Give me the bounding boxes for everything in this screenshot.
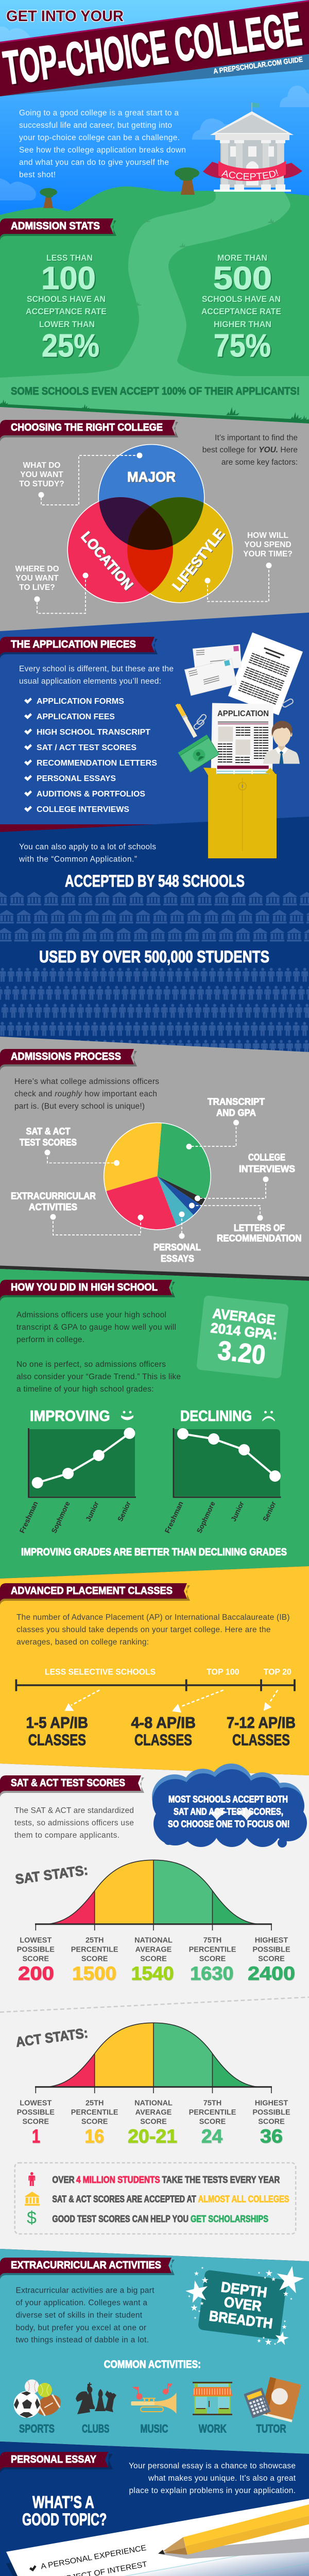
- chart: act bell curve: SCORE: [23, 2117, 49, 2126]
- chart: sat bell curve: PERCENTILE: [71, 1945, 118, 1954]
- subheading: what's a good topic: GOOD TOPIC?: [22, 2510, 107, 2529]
- intro text: [129, 2462, 296, 2495]
- stat: class counts: CLASSES: [134, 1731, 192, 1749]
- label: how will you spend your time: YOUR TIME?: [243, 550, 293, 558]
- intro text: [14, 1806, 134, 1840]
- label: what do you want to study: [19, 461, 64, 488]
- fact: four million students: TAKE THE TESTS EVERY YEAR: [162, 2175, 280, 2185]
- label: transcript and gpa: AND GPA: [216, 1108, 256, 1118]
- chart: improving: [18, 1408, 136, 1534]
- chart: act bell curve: SCORE: [81, 2117, 108, 2126]
- callout cloud: [152, 1764, 307, 1848]
- icon rows: students: [0, 968, 309, 1054]
- label: sat and act test scores: TEST SCORES: [20, 1138, 77, 1148]
- stat: less than 100 schools: LESS THAN: [46, 253, 93, 263]
- label: how will you spend your time: HOW WILL: [247, 531, 288, 540]
- title banner: [0, 0, 309, 96]
- chart: declining: DECLINING: [180, 1408, 252, 1425]
- label: letters of recommendation: RECOMMENDATION: [217, 1233, 302, 1244]
- chart: improving: IMPROVING: [30, 1408, 110, 1425]
- venn diagram: [68, 445, 232, 602]
- chart: sat bell curve: [14, 1860, 295, 1984]
- chart: sat bell curve: 1500: [72, 1963, 116, 1984]
- chart: sat bell curve: SAT STATS:: [14, 1862, 89, 1887]
- chart: act bell curve: 24: [201, 2126, 222, 2147]
- panel: admissions process: [0, 1037, 309, 1283]
- icon: student: [28, 2172, 35, 2186]
- activity labels: SPORTS: [19, 2422, 55, 2435]
- intro text: what makes you unique. It’s also a great: [148, 2474, 296, 2483]
- stat: less than 100 schools: 100: [41, 261, 96, 296]
- callout: average gpa: 2014 GPA:: [210, 1320, 278, 1343]
- intro text: No one is perfect, so admissions officers: [16, 1360, 166, 1369]
- subheading: common activities: COMMON ACTIVITIES:: [104, 2359, 201, 2370]
- panel: choosing the right college: [0, 407, 309, 639]
- callout: depth over breadth: OVER: [223, 2294, 263, 2314]
- illustration: application packet: [176, 633, 303, 858]
- label: where do you want to live: YOU WANT: [15, 574, 59, 583]
- icon: school: [25, 2192, 40, 2206]
- intro text: your top-choice college can be a challenge.: [19, 133, 180, 142]
- callout: average gpa: 3.20: [216, 1335, 267, 1370]
- intro text: transcript & GPA to gauge how well you will: [16, 1323, 176, 1332]
- label: college interviews: INTERVIEWS: [239, 1164, 295, 1174]
- stat: less than 100 schools: LOWER THAN: [39, 319, 95, 329]
- intro text: best college for YOU. Here: [202, 446, 298, 454]
- intro text: and what you can do to give yourself the: [19, 158, 169, 167]
- checklist: APPLICATION FEES: [37, 713, 115, 721]
- label: sat and act test scores: [20, 1126, 77, 1148]
- stat: class counts: [26, 1714, 296, 1749]
- fact: almost all colleges: ALMOST ALL COLLEGES: [198, 2194, 289, 2204]
- connector: major: [38, 452, 142, 505]
- chart: sat bell curve: 75TH: [203, 1936, 221, 1944]
- venn labels: LIFESTYLE: [169, 526, 228, 594]
- arrows: [65, 1690, 278, 1713]
- heading: CHOOSING THE RIGHT COLLEGE: [11, 422, 163, 433]
- intro text: also consider your “Grade Trend.” This is like: [16, 1372, 181, 1381]
- icon: store: [193, 2382, 233, 2415]
- chart: sat bell curve: 25TH: [85, 1936, 104, 1944]
- intro text: diverse set of skills in their student: [15, 2311, 143, 2319]
- chart: sat bell curve: PERCENTILE: [189, 1945, 236, 1954]
- heading: [0, 1775, 144, 1797]
- connector: lifestyle: [205, 563, 272, 602]
- heading: admission stats: [0, 218, 116, 240]
- label: how will you spend your time: [243, 531, 293, 558]
- connector: interviews: [195, 1177, 269, 1201]
- pie chart: [104, 1122, 211, 1230]
- heading: HOW YOU DID IN HIGH SCHOOL: [11, 1282, 158, 1293]
- label: personal essays: [153, 1242, 201, 1264]
- heading: PERSONAL ESSAY: [11, 2454, 97, 2465]
- document sheet: [228, 633, 303, 715]
- chart: act bell curve: 16: [84, 2126, 104, 2147]
- chart: sat bell curve: SCORE: [199, 1955, 226, 1963]
- chart: act bell curve: SCORE: [140, 2117, 167, 2126]
- callout: depth over breadth: DEPTH: [220, 2279, 268, 2300]
- panel: test facts: [15, 2163, 296, 2234]
- paperclips and pen: [193, 698, 294, 730]
- panel: extracurricular activities: [0, 2249, 309, 2454]
- fact: four million students: OVER: [52, 2175, 75, 2185]
- label: personal essays: ESSAYS: [161, 1253, 194, 1264]
- student: [263, 721, 300, 764]
- application form: [211, 703, 273, 776]
- text: common application: with the “Common Application.”: [19, 855, 137, 863]
- chart: sat bell curve: NATIONAL: [134, 1936, 173, 1944]
- envelopes: [185, 644, 242, 696]
- good topic list: [29, 2544, 148, 2576]
- clouds: [0, 27, 309, 200]
- activity labels: [19, 2422, 286, 2435]
- money: [178, 735, 219, 772]
- connector: test scores: [44, 1150, 119, 1166]
- winding road: [0, 191, 309, 428]
- intro text: Admissions officers use your high school: [16, 1311, 166, 1319]
- chart: act bell curve: PERCENTILE: [189, 2108, 236, 2116]
- chart: act bell curve: PERCENTILE: [71, 2108, 118, 2116]
- intro text: perform in college.: [16, 1335, 84, 1344]
- label: what do you want to study: YOU WANT: [20, 470, 63, 479]
- heading: THE APPLICATION PIECES: [11, 639, 136, 650]
- chart: act bell curve: SCORE: [199, 2117, 226, 2126]
- stat: class counts: 1-5 AP/IB: [26, 1714, 88, 1732]
- icon: college building with accepted ribbon: [203, 103, 302, 192]
- connector: transcript and gpa: [186, 1120, 239, 1149]
- callout: depth over breadth: [184, 2264, 306, 2345]
- chart: declining: Sophmore: [195, 1500, 217, 1534]
- connector: personal essays: [179, 1212, 184, 1239]
- chart: declining: Freshman: [163, 1500, 185, 1534]
- heading: ADMISSIONS PROCESS: [11, 1051, 121, 1062]
- chart: declining: Senior: [261, 1500, 278, 1522]
- chart: sat bell curve: LOWEST: [20, 1936, 52, 1944]
- stat: less than 100 schools: [26, 253, 107, 364]
- label: college interviews: [239, 1152, 295, 1174]
- fact: scholarships: GOOD TEST SCORES CAN HELP YOU: [52, 2214, 188, 2224]
- checklist: AUDITIONS & PORTFOLIOS: [37, 790, 145, 799]
- timeline: TOP 20: [264, 1667, 291, 1676]
- panel: how you did in high school: [0, 1269, 309, 1579]
- label: personal essays: PERSONAL: [153, 1242, 201, 1252]
- activity labels: CLUBS: [82, 2422, 109, 2435]
- venn labels: [78, 469, 228, 594]
- panel: hills: [0, 103, 309, 423]
- intro text: classes you should take depends on your target college. Here are the: [16, 1625, 271, 1634]
- heading: [0, 1280, 175, 1301]
- timeline: [16, 1667, 295, 1713]
- heading: [0, 2258, 175, 2279]
- label: letters of recommendation: [217, 1223, 302, 1244]
- intro text: Here’s what college admissions officers: [14, 1077, 159, 1086]
- intro text: body, but prefer you excel at one or: [15, 2324, 146, 2332]
- intro text: The number of Advance Placement (AP) or International Baccalaureate (IB): [16, 1613, 289, 1622]
- stat: less than 100 schools: SCHOOLS HAVE AN: [27, 294, 106, 304]
- chart: declining: Junior: [229, 1500, 246, 1522]
- chart: sat bell curve: 200: [18, 1963, 54, 1984]
- chart: act bell curve: 1: [32, 2126, 40, 2147]
- chart: act bell curve: 36: [260, 2126, 283, 2147]
- heading: [0, 1049, 137, 1071]
- venn labels: MAJOR: [127, 469, 176, 485]
- intro text: check and roughly how important each: [14, 1090, 157, 1098]
- good topic list: A PERSONAL EXPERIENCE: [40, 2544, 147, 2571]
- fact: four million students: [52, 2175, 280, 2185]
- checklist: PERSONAL ESSAYS: [37, 774, 116, 783]
- heading: [0, 420, 178, 442]
- label: extracurricular activities: [11, 1191, 96, 1212]
- intro text: them to compare applicants.: [14, 1831, 119, 1840]
- callout cloud: MOST SCHOOLS ACCEPT BOTH: [168, 1794, 288, 1804]
- icon: left tree: [40, 188, 57, 208]
- icon: college building with accepted ribbon: ACCEPTED!: [221, 170, 279, 180]
- envelope: [203, 768, 277, 858]
- title: get into your: GET INTO YOUR: [6, 8, 124, 25]
- stat: more than 500 schools: SCHOOLS HAVE AN: [202, 294, 281, 304]
- chart: sat bell curve: POSSIBLE: [252, 1945, 290, 1954]
- label: letters of recommendation: LETTERS OF: [234, 1223, 285, 1233]
- chart: improving: Sophmore: [49, 1500, 72, 1534]
- icon: chess pieces: [76, 2382, 116, 2414]
- heading: [0, 1583, 190, 1605]
- intro text: Your personal essay is a chance to showcase: [129, 2462, 296, 2470]
- chart: act bell curve: LOWEST: [20, 2099, 52, 2107]
- callout: average gpa: AVERAGE: [212, 1306, 276, 1328]
- stat: more than 500 schools: [201, 253, 281, 364]
- chart: act bell curve: 20-21: [128, 2126, 177, 2147]
- intro text: are some key factors:: [221, 458, 298, 467]
- intro text: successful life and career, but getting into: [19, 121, 172, 130]
- label: college interviews: COLLEGE: [248, 1152, 285, 1162]
- fact: four million students: 4 MILLION STUDENTS: [76, 2175, 160, 2185]
- intro text: The SAT & ACT are standardized: [14, 1806, 134, 1815]
- intro text: [19, 109, 186, 179]
- heading: [0, 2452, 113, 2473]
- checklist: RECOMMENDATION LETTERS: [37, 759, 157, 768]
- icon: trumpet and notes: [131, 2383, 176, 2414]
- application form: APPLICATION: [217, 709, 269, 718]
- label: extracurricular activities: ACTIVITIES: [29, 1202, 77, 1212]
- callout: depth over breadth: BREADTH: [208, 2308, 273, 2332]
- intro text: best shot!: [19, 171, 56, 179]
- label: where do you want to live: TO LIVE?: [19, 583, 55, 592]
- label: what do you want to study: TO STUDY?: [19, 480, 64, 488]
- stat: class counts: 7-12 AP/IB: [227, 1714, 296, 1732]
- timeline: TOP 100: [207, 1667, 239, 1676]
- chart: act bell curve: NATIONAL: [134, 2099, 173, 2107]
- chart: declining: [163, 1408, 281, 1534]
- icon: right tree: [175, 167, 199, 195]
- heading: ADVANCED PLACEMENT CLASSES: [11, 1585, 173, 1597]
- heading: admission stats: ADMISSION STATS: [11, 221, 100, 232]
- chart: improving: Senior: [116, 1500, 132, 1522]
- checklist: [24, 697, 157, 814]
- intro text: [202, 434, 298, 467]
- intro text: Going to a good college is a great start to a: [19, 109, 179, 117]
- chart: sat bell curve: SCORE: [258, 1955, 285, 1963]
- intro text: See how the college application breaks down: [19, 146, 186, 155]
- chart: improving: Junior: [84, 1500, 100, 1522]
- connector: letters: [189, 1202, 263, 1221]
- intro text: two things instead of dabble in a lot.: [15, 2336, 149, 2344]
- panel: sat and act test scores: [0, 1764, 309, 2261]
- stat: class counts: CLASSES: [232, 1731, 290, 1749]
- panel: hero sky and title: [0, 0, 309, 227]
- chart: sat bell curve: POSSIBLE: [17, 1945, 55, 1954]
- heading: [0, 637, 158, 658]
- icon: frown: [263, 1411, 275, 1421]
- chart: act bell curve: ACT STATS:: [15, 2025, 89, 2050]
- subheading: what's a good topic: [22, 2493, 107, 2529]
- checklist: HIGH SCHOOL TRANSCRIPT: [37, 728, 151, 737]
- intro text: a timeline of your high school grades:: [16, 1385, 153, 1394]
- fact: scholarships: GET SCHOLARSHIPS: [191, 2214, 268, 2224]
- stat: accepted by 548 schools: ACCEPTED BY 548 SCHOOLS: [65, 872, 245, 890]
- label: extracurricular activities: EXTRACURRICULAR: [11, 1191, 96, 1201]
- label: where do you want to live: [15, 565, 59, 592]
- intro text: tests, so admissions officers use: [14, 1819, 134, 1827]
- chart: act bell curve: HIGHEST: [255, 2099, 288, 2107]
- text: common application: You can also apply to a lot of schools: [19, 843, 156, 851]
- chart: sat bell curve: SCORE: [140, 1955, 167, 1963]
- chart: sat bell curve: 2400: [248, 1963, 295, 1984]
- intro text: Every school is different, but these are the: [19, 665, 174, 673]
- text: common application: [19, 843, 156, 863]
- heading: EXTRACURRICULAR ACTIVITIES: [11, 2260, 161, 2271]
- label: sat and act test scores: SAT & ACT: [26, 1126, 70, 1137]
- timeline: LESS SELECTIVE SCHOOLS: [45, 1667, 156, 1676]
- intro text: [14, 1077, 159, 1111]
- stat: more than 500 schools: MORE THAN: [217, 253, 267, 263]
- chart: sat bell curve: AVERAGE: [135, 1945, 172, 1954]
- activity labels: TUTOR: [256, 2422, 286, 2435]
- stat: more than 500 schools: 75%: [214, 328, 271, 364]
- chart: sat bell curve: SCORE: [23, 1955, 49, 1963]
- stat: less than 100 schools: ACCEPTANCE RATE: [26, 307, 107, 316]
- fact: almost all colleges: SAT & ACT SCORES ARE ACCEPTED AT: [52, 2194, 196, 2204]
- intro text: [16, 1311, 181, 1394]
- checklist: APPLICATION FORMS: [37, 697, 124, 706]
- icon: smile: [121, 1411, 133, 1420]
- intro text: Extracurricular activities are a big part: [15, 2286, 154, 2295]
- icon: sports: [13, 2379, 64, 2420]
- stat: more than 500 schools: ACCEPTANCE RATE: [201, 307, 281, 316]
- checklist: COLLEGE INTERVIEWS: [37, 805, 129, 814]
- callout cloud: SAT AND ACT TEST SCORES,: [174, 1806, 283, 1817]
- chart: act bell curve: SCORE: [258, 2117, 285, 2126]
- stat: class counts: CLASSES: [28, 1731, 86, 1749]
- intro text: averages, based on college ranking:: [16, 1638, 149, 1647]
- chart: act bell curve: POSSIBLE: [252, 2108, 290, 2116]
- icon rows: schools: [0, 892, 309, 942]
- intro text: place to explain problems in your application.: [129, 2486, 296, 2495]
- icon: book and calculator: [244, 2377, 301, 2422]
- intro text: part is. (But every school is unique!): [14, 1102, 145, 1111]
- stat: more than 500 schools: HIGHER THAN: [214, 319, 271, 329]
- subheading: what's a good topic: WHAT’S A: [32, 2493, 94, 2512]
- chart: act bell curve: 25TH: [85, 2099, 104, 2107]
- label: transcript and gpa: TRANSCRIPT: [208, 1096, 265, 1107]
- intro text: It’s important to find the: [215, 434, 298, 442]
- chart: act bell curve: POSSIBLE: [17, 2108, 55, 2116]
- intro text: [15, 2286, 154, 2344]
- label: what do you want to study: WHAT DO: [23, 461, 60, 470]
- intro text: of your application. Colleges want a: [15, 2299, 147, 2307]
- stat: less than 100 schools: 25%: [42, 328, 99, 364]
- heading: SAT & ACT TEST SCORES: [11, 1777, 125, 1789]
- chart: act bell curve: AVERAGE: [135, 2108, 172, 2116]
- connector: location: [34, 573, 89, 613]
- icon: dollar: $: [27, 2208, 37, 2228]
- intro text: [19, 665, 174, 686]
- label: where do you want to live: WHERE DO: [15, 565, 59, 573]
- panel: the application pieces: [0, 613, 309, 1056]
- label: how will you spend your time: YOU SPEND: [244, 540, 291, 549]
- illustration: essay paper and pencil: [6, 2499, 309, 2576]
- panel: advanced placement classes: [0, 1566, 309, 1775]
- checklist: SAT / ACT TEST SCORES: [37, 743, 136, 752]
- intro text: [16, 1613, 289, 1647]
- callout: average gpa: [196, 1295, 289, 1379]
- chart: act bell curve: [15, 2023, 290, 2147]
- venn labels: LOCATION: [78, 529, 136, 593]
- chart: sat bell curve: HIGHEST: [255, 1936, 288, 1944]
- panel: personal essay: [0, 2442, 309, 2576]
- connector: extracurricular: [50, 1214, 143, 1235]
- label: transcript and gpa: [208, 1096, 265, 1118]
- chart: sat bell curve: 1630: [190, 1963, 234, 1984]
- intro text: usual application elements you’ll need:: [19, 677, 161, 686]
- stars: [184, 2264, 306, 2345]
- chart: act bell curve: 75TH: [203, 2099, 221, 2107]
- stat: more than 500 schools: 500: [213, 261, 272, 296]
- chart: improving: Freshman: [18, 1500, 40, 1534]
- chart: sat bell curve: 1540: [131, 1963, 174, 1984]
- activity labels: WORK: [199, 2422, 227, 2435]
- chart: sat bell curve: SCORE: [81, 1955, 108, 1963]
- stat: class counts: 4-8 AP/IB: [131, 1714, 196, 1732]
- activity labels: MUSIC: [140, 2422, 168, 2435]
